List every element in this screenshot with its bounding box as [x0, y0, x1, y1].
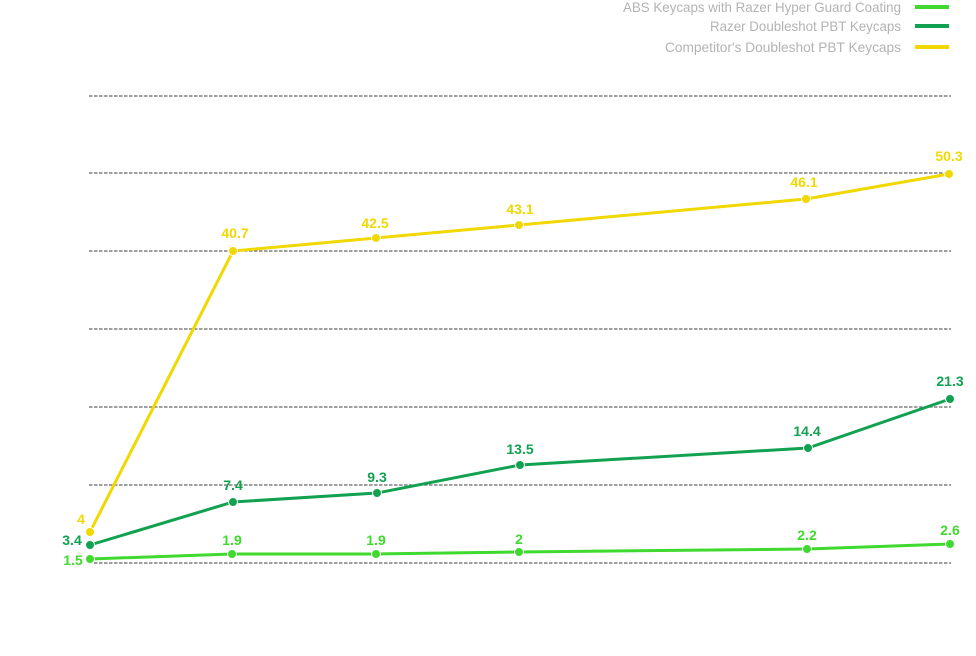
series: Razer Doubleshot PBT: 21.3: [936, 373, 964, 389]
legend: Razer PBT: Razer Doubleshot PBT Keycaps: [710, 18, 901, 34]
series: Competitor's Doubleshot PBT: 43.1: [506, 201, 534, 217]
series: Razer Doubleshot PBT: 13.5: [506, 441, 534, 457]
series: ABS with Hyper Guard: [63, 522, 960, 568]
series: Razer Doubleshot PBT: 9.3: [367, 469, 387, 485]
series: ABS with Hyper Guard: 1.9: [366, 532, 386, 548]
series: ABS with Hyper Guard: 1.5: [63, 552, 83, 568]
legend: Competitor PBT: Competitor's Doubleshot PBT Keycaps: [665, 39, 901, 55]
series: Razer Doubleshot PBT: [62, 373, 964, 550]
series: Razer Doubleshot PBT: 7.4: [223, 477, 243, 493]
series: Razer Doubleshot PBT: 3.4: [62, 532, 82, 548]
series: ABS with Hyper Guard: 2: [515, 531, 523, 547]
series: ABS with Hyper Guard: 2.6: [940, 522, 960, 538]
series: ABS with Hyper Guard: 1.9: [222, 532, 242, 548]
series: Competitor's Doubleshot PBT: [77, 148, 963, 536]
series: ABS with Hyper Guard: 2.2: [797, 527, 817, 543]
series: Razer Doubleshot PBT: 14.4: [793, 423, 821, 439]
legend: [623, 0, 949, 55]
series: Competitor's Doubleshot PBT: 40.7: [221, 225, 249, 241]
series: Competitor's Doubleshot PBT: 4: [77, 511, 85, 527]
series: Competitor's Doubleshot PBT: 42.5: [361, 215, 389, 231]
series: Competitor's Doubleshot PBT: 46.1: [790, 174, 818, 190]
series: Competitor's Doubleshot PBT: 50.3: [935, 148, 963, 164]
